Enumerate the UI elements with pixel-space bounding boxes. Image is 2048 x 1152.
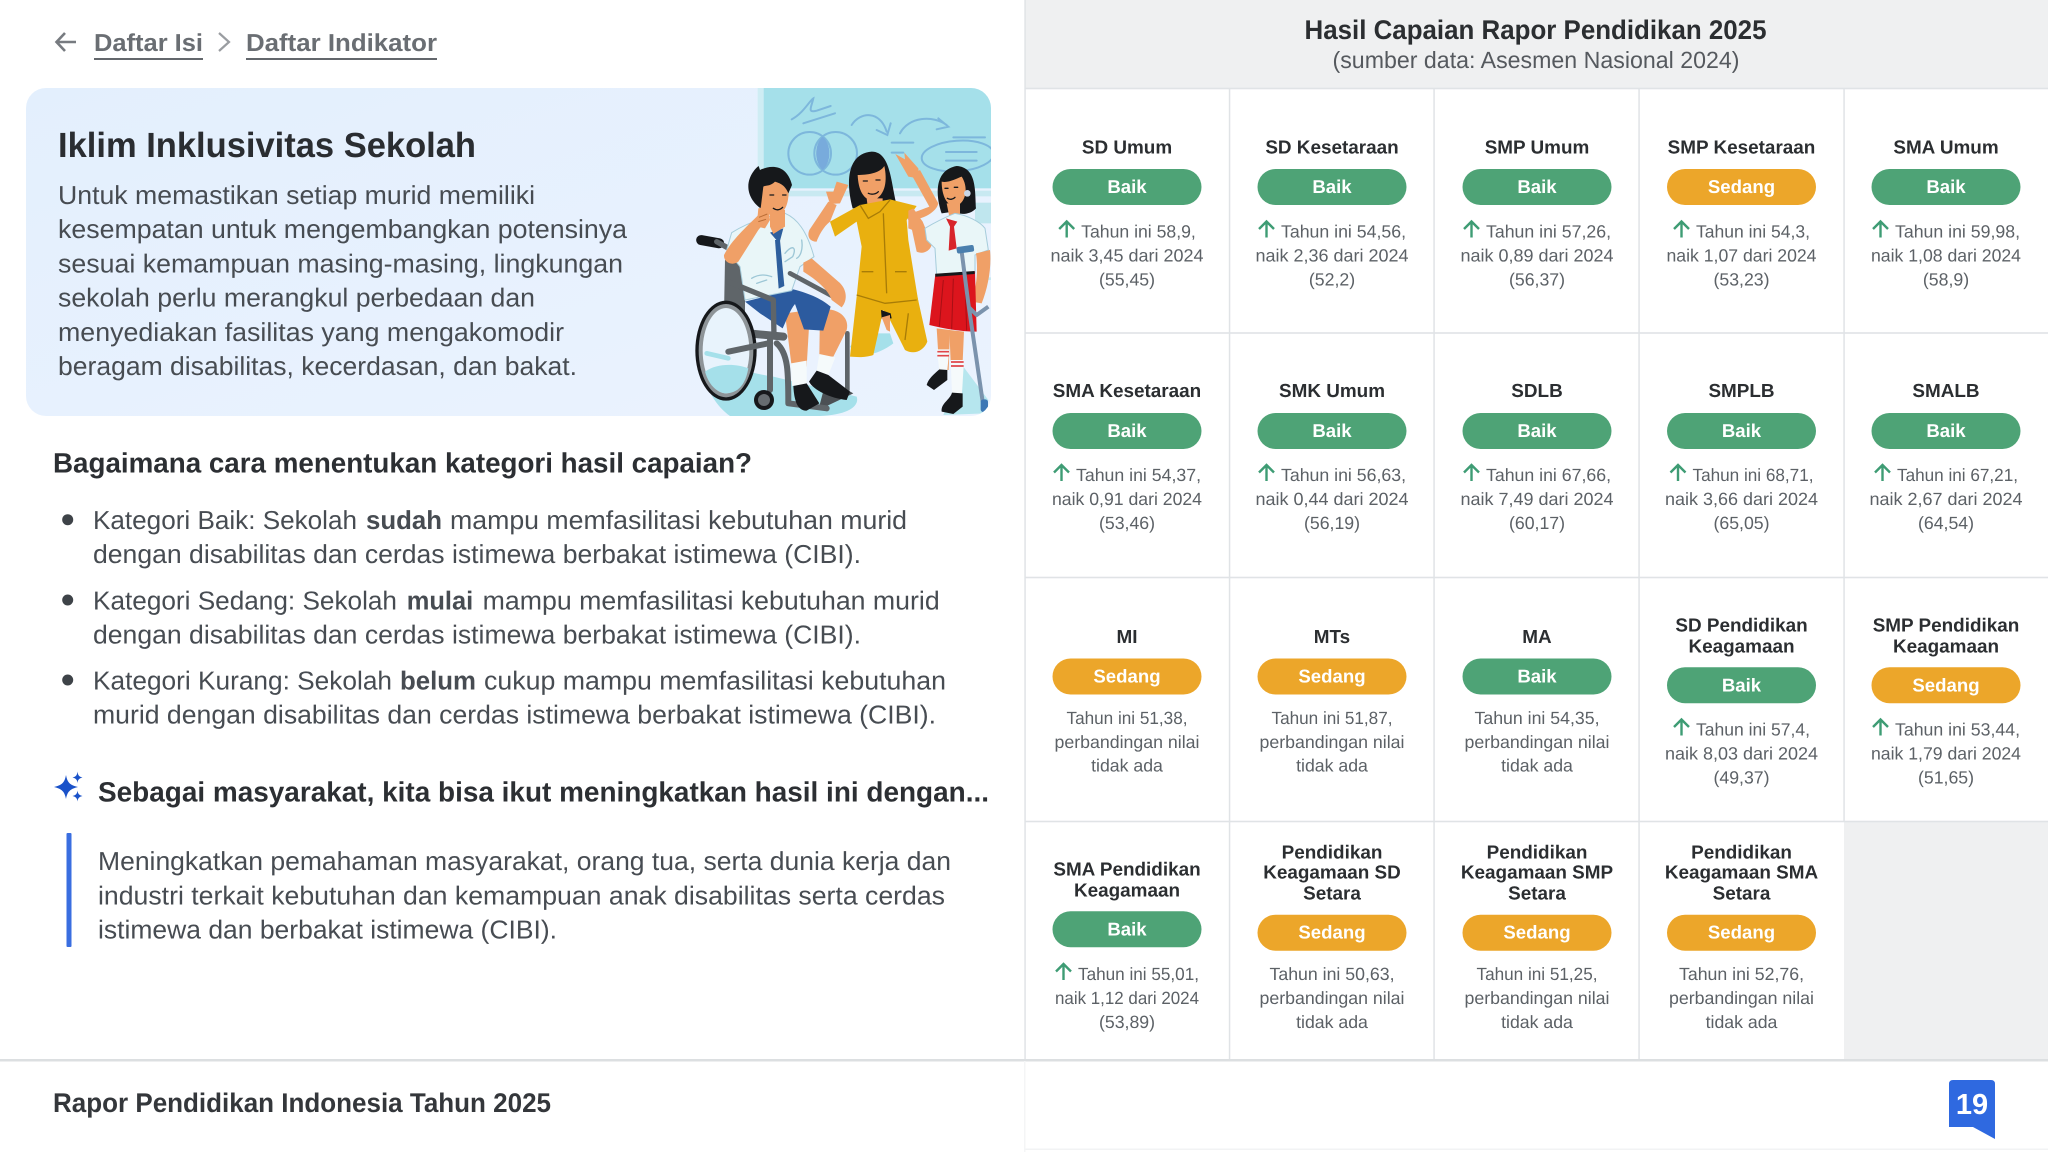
cell: SMK Umum: (56,19) xyxy=(1304,513,1360,533)
cell: SDLB: (60,17) xyxy=(1509,513,1565,533)
cell: SMA Kesetaraan: Baik xyxy=(1107,420,1147,441)
panel: results header xyxy=(1025,0,2048,88)
cell: Pendidikan Keagamaan SMA Setara: Keagamaan SMA xyxy=(1665,863,1818,884)
figure: student in wheelchair xyxy=(695,166,853,411)
cell: MI: MI xyxy=(1116,627,1138,648)
cell: SD Kesetaraan: naik 2,36 dari 2024 xyxy=(1256,246,1409,266)
classroom board xyxy=(758,87,997,280)
cell: SMALB: Baik xyxy=(1926,420,1966,441)
cell: Pendidikan Keagamaan SD Setara: Tahun ini 50,63, xyxy=(1270,964,1394,984)
cell: SD Umum: SD Umum xyxy=(1082,137,1172,158)
cell: Pendidikan Keagamaan SMP Setara: perbandingan nilai xyxy=(1464,988,1610,1008)
cell: SD Umum: Baik xyxy=(1107,176,1147,197)
cell: SD Pendidikan Keagamaan: naik 8,03 dari 2024 xyxy=(1665,744,1818,764)
panel: intro card xyxy=(26,87,997,416)
list item: Kategori Baik: sudah xyxy=(366,505,442,535)
cell: SMALB: (64,54) xyxy=(1918,513,1974,533)
cell: SD Kesetaraan xyxy=(1256,137,1409,290)
cell: Pendidikan Keagamaan SMP Setara: Sedang xyxy=(1503,922,1571,943)
yellow uniform xyxy=(830,199,918,302)
cell: SMK Umum: naik 0,44 dari 2024 xyxy=(1256,489,1409,509)
text block: intro paragraph: sesuai kemampuan masing-masing, lingkungan xyxy=(58,248,623,278)
cell: Pendidikan Keagamaan SD Setara xyxy=(1258,842,1406,1032)
cell: Pendidikan Keagamaan SMA Setara: Tahun ini 52,76, xyxy=(1679,964,1804,984)
cell: SMP Kesetaraan xyxy=(1666,137,1817,290)
list item: Kategori Baik: mampu memfasilitasi kebutuhan murid xyxy=(450,505,907,535)
list item: Kategori Kurang: Kategori Kurang: Sekolah xyxy=(93,666,392,696)
icon: chevron xyxy=(219,33,229,51)
crutch xyxy=(962,252,988,402)
cell: SMP Pendidikan Keagamaan: Keagamaan xyxy=(1893,636,1999,657)
cell: SD Umum: naik 3,45 dari 2024 xyxy=(1050,246,1204,266)
text block: intro paragraph: kesempatan untuk mengembangkan potensinya xyxy=(58,214,628,244)
callout: community action xyxy=(66,833,951,947)
cell: SD Pendidikan Keagamaan: SD Pendidikan xyxy=(1675,616,1808,637)
cell: Pendidikan Keagamaan SD Setara: tidak ada xyxy=(1296,1012,1368,1032)
cell: SMA Pendidikan Keagamaan: (53,89) xyxy=(1099,1012,1155,1032)
cell: MA: tidak ada xyxy=(1501,756,1573,776)
arm xyxy=(975,250,990,304)
icon: back arrow xyxy=(56,33,76,51)
head xyxy=(770,210,785,234)
icon: sparkles xyxy=(54,772,82,802)
cell: SDLB: naik 7,49 dari 2024 xyxy=(1460,489,1614,509)
cell: SMP Umum: SMP Umum xyxy=(1485,137,1589,158)
shirt xyxy=(925,213,988,275)
footer title: Rapor Pendidikan Indonesia Tahun 2025 xyxy=(53,1088,551,1118)
skirt xyxy=(929,271,977,332)
callout: community action: Meningkatkan pemahaman masyarakat, orang tua, serta dunia kerja dan xyxy=(98,846,951,876)
illustration: teacher and students with disabilities xyxy=(695,87,997,416)
cell: MTs xyxy=(1258,627,1406,776)
cell: SD Kesetaraan: SD Kesetaraan xyxy=(1265,137,1399,158)
figure: teacher xyxy=(808,152,938,357)
cell: SMA Kesetaraan xyxy=(1052,381,1202,533)
list item: Kategori Baik: dengan disabilitas dan cerdas istimewa berbakat istimewa (CIBI). xyxy=(93,539,861,569)
cell: SD Kesetaraan: (52,2) xyxy=(1309,270,1355,290)
cell: SMK Umum: SMK Umum xyxy=(1279,381,1385,402)
cell: MTs: Sedang xyxy=(1298,666,1366,686)
heading: how categories are determined: Bagaimana cara menentukan kategori hasil capaian? xyxy=(53,448,752,478)
cell: SMALB: naik 2,67 dari 2024 xyxy=(1870,489,2023,509)
cell: SMPLB xyxy=(1665,381,1818,533)
cell: MTs: Tahun ini 51,87, xyxy=(1272,708,1392,728)
cell: SMA Kesetaraan: Tahun ini 54,37, xyxy=(1076,465,1201,485)
list item: Kategori Baik xyxy=(62,505,907,569)
cell: SD Kesetaraan: Tahun ini 54,56, xyxy=(1281,222,1406,242)
list item: Kategori Kurang: murid dengan disabilitas dan cerdas istimewa berbakat istimewa (CIBI). xyxy=(93,699,936,729)
cell: MI: Sedang xyxy=(1093,666,1161,686)
cell: Pendidikan Keagamaan SMA Setara: tidak ada xyxy=(1706,1012,1778,1032)
cell: SMA Pendidikan Keagamaan: Tahun ini 55,01, xyxy=(1078,964,1199,984)
cell: SMP Kesetaraan: SMP Kesetaraan xyxy=(1668,137,1815,158)
cell: SD Pendidikan Keagamaan: (49,37) xyxy=(1713,767,1770,787)
arms xyxy=(724,216,760,264)
cell: SMP Umum: naik 0,89 dari 2024 xyxy=(1460,246,1614,266)
cell: SMPLB: Tahun ini 68,71, xyxy=(1692,465,1814,485)
heading: Iklim Inklusivitas Sekolah: Iklim Inklusivitas Sekolah xyxy=(58,126,476,165)
cell: SMP Pendidikan Keagamaan: naik 1,79 dari 2024 xyxy=(1871,744,2021,764)
cell: SD Umum: (55,45) xyxy=(1099,270,1155,290)
cell: SD Pendidikan Keagamaan: Keagamaan xyxy=(1688,636,1795,657)
cell: Pendidikan Keagamaan SMA Setara: Setara xyxy=(1713,883,1771,904)
callout: community action: industri terkait kebutuhan dan kemampuan anak disabilitas serta cerdas xyxy=(98,880,945,910)
cell: MI: perbandingan nilai xyxy=(1054,732,1200,752)
floor shadow xyxy=(711,372,858,416)
cell: Pendidikan Keagamaan SMP Setara xyxy=(1461,842,1613,1032)
cell: SMA Pendidikan Keagamaan: Baik xyxy=(1107,918,1147,939)
cell: SD Umum: Tahun ini 58,9, xyxy=(1081,222,1196,242)
cell: SMP Umum: (56,37) xyxy=(1509,270,1565,290)
cell: Pendidikan Keagamaan SMA Setara: Sedang xyxy=(1708,922,1775,943)
text block: intro paragraph: sekolah perlu merangkul perbedaan dan xyxy=(58,282,535,312)
cell: Pendidikan Keagamaan SD Setara: Sedang xyxy=(1298,922,1366,943)
cell: MI: tidak ada xyxy=(1091,756,1163,776)
cell: SMP Kesetaraan: Tahun ini 54,3, xyxy=(1696,222,1810,242)
cell: SDLB xyxy=(1460,381,1614,533)
legs xyxy=(786,312,809,366)
cell: Pendidikan Keagamaan SMA Setara xyxy=(1665,842,1818,1032)
cell: Pendidikan Keagamaan SMP Setara: Keagamaan SMP xyxy=(1461,863,1613,884)
cell: Pendidikan Keagamaan SD Setara: Setara xyxy=(1303,883,1361,904)
cell: SMA Umum xyxy=(1871,137,2021,290)
callout: community action: istimewa dan berbakat istimewa (CIBI). xyxy=(98,914,557,944)
cell: SD Umum xyxy=(1050,137,1204,290)
cell: SMA Kesetaraan: SMA Kesetaraan xyxy=(1053,381,1201,402)
cell: SMA Pendidikan Keagamaan: naik 1,12 dari 2024 xyxy=(1055,988,1199,1008)
cell: SMPLB: naik 3,66 dari 2024 xyxy=(1665,489,1818,509)
cell: SMA Pendidikan Keagamaan: SMA Pendidikan xyxy=(1053,860,1201,881)
subtitle: data source: (sumber data: Asesmen Nasional 2024) xyxy=(1332,47,1740,73)
cell: Pendidikan Keagamaan SMP Setara: Setara xyxy=(1508,883,1566,904)
cell: SD Pendidikan Keagamaan: Baik xyxy=(1722,674,1762,695)
cell: SMP Pendidikan Keagamaan: Sedang xyxy=(1912,674,1980,695)
big wheel xyxy=(695,301,757,401)
cell: SMA Pendidikan Keagamaan xyxy=(1052,860,1202,1032)
cell: Pendidikan Keagamaan SMP Setara: tidak ada xyxy=(1501,1012,1573,1032)
list item: Kategori Kurang: belum xyxy=(400,666,476,696)
list item: Kategori Baik: Kategori Baik: Sekolah xyxy=(93,505,357,535)
cell: SMP Pendidikan Keagamaan: Tahun ini 53,44, xyxy=(1895,720,2020,740)
cell: SMP Kesetaraan: naik 1,07 dari 2024 xyxy=(1666,246,1817,266)
cell: MTs: tidak ada xyxy=(1296,756,1368,776)
cell: SMP Kesetaraan: (53,23) xyxy=(1713,270,1770,290)
cell: SDLB: Tahun ini 67,66, xyxy=(1486,465,1611,485)
cell: MA xyxy=(1462,627,1612,776)
cell: SMA Umum: (58,9) xyxy=(1923,270,1969,290)
cell: SMA Umum: Tahun ini 59,98, xyxy=(1895,222,2020,242)
cell: SMK Umum xyxy=(1256,381,1409,533)
cell: SMP Umum: Baik xyxy=(1517,176,1557,197)
cell: SMA Umum: SMA Umum xyxy=(1893,137,1999,158)
list item: Kategori Kurang xyxy=(62,666,946,729)
panel: results grid xyxy=(1050,137,2023,1032)
page number badge xyxy=(1949,1080,1995,1139)
cell: SMP Pendidikan Keagamaan: SMP Pendidikan xyxy=(1873,616,2019,637)
list item: Kategori Sedang: mulai xyxy=(407,585,473,615)
cell: MTs: MTs xyxy=(1314,627,1350,648)
cell: SMALB: SMALB xyxy=(1912,381,1980,402)
cell: SMA Umum: naik 1,08 dari 2024 xyxy=(1871,246,2021,266)
cell: SMA Kesetaraan: naik 0,91 dari 2024 xyxy=(1052,489,1202,509)
shorts xyxy=(745,289,831,331)
link: Daftar Indikator: Daftar Indikator xyxy=(246,30,437,57)
cell: MA: Tahun ini 54,35, xyxy=(1474,708,1600,728)
text block: intro paragraph: Untuk memastikan setiap murid memiliki xyxy=(58,180,535,210)
cell: SMP Umum xyxy=(1460,137,1614,290)
right raised arm xyxy=(907,170,938,220)
cell: SDLB: Baik xyxy=(1517,420,1557,441)
cell: Pendidikan Keagamaan SMA Setara: Pendidikan xyxy=(1691,842,1792,863)
cell: MTs: perbandingan nilai xyxy=(1260,732,1404,752)
link: Daftar Isi: Daftar Isi xyxy=(94,30,203,57)
left raised arm xyxy=(808,202,837,242)
cell: SMA Pendidikan Keagamaan: Keagamaan xyxy=(1074,880,1180,901)
text block: intro paragraph: beragam disabilitas, kecerdasan, dan bakat. xyxy=(58,351,577,381)
hair xyxy=(849,152,896,208)
cell: Pendidikan Keagamaan SMP Setara: Tahun ini 51,25, xyxy=(1476,964,1598,984)
cell: SD Kesetaraan: Baik xyxy=(1312,176,1352,197)
breadcrumb navigation xyxy=(56,30,437,60)
cell: MI xyxy=(1052,627,1202,776)
cell: SD Pendidikan Keagamaan: Tahun ini 57,4, xyxy=(1696,720,1810,740)
cell: Pendidikan Keagamaan SMA Setara: perbandingan nilai xyxy=(1669,988,1814,1008)
cell: SMALB: Tahun ini 67,21, xyxy=(1897,465,2018,485)
cell: MA: MA xyxy=(1522,627,1552,648)
page number badge: 19 xyxy=(1956,1089,1988,1121)
legs xyxy=(937,328,950,370)
cell: Pendidikan Keagamaan SMP Setara: Pendidikan xyxy=(1487,842,1587,863)
cell: Pendidikan Keagamaan SD Setara: perbandingan nilai xyxy=(1260,988,1404,1008)
cell: SMP Kesetaraan: Sedang xyxy=(1708,176,1775,197)
cell: MA: Baik xyxy=(1517,666,1557,686)
cell: SMPLB: Baik xyxy=(1722,420,1762,441)
text block: intro paragraph xyxy=(58,180,628,381)
cell: SMPLB: (65,05) xyxy=(1713,513,1770,533)
text block: intro paragraph: menyediakan fasilitas yang mengakomodir xyxy=(58,317,564,347)
cell: SMP Pendidikan Keagamaan: (51,65) xyxy=(1918,767,1974,787)
cell: SMP Pendidikan Keagamaan xyxy=(1871,616,2021,787)
cell: MI: Tahun ini 51,38, xyxy=(1066,708,1188,728)
cell: SMK Umum: Tahun ini 56,63, xyxy=(1281,465,1406,485)
cell: SD Pendidikan Keagamaan xyxy=(1665,616,1818,787)
list item: Kategori Kurang: cukup mampu memfasilitasi kebutuhan xyxy=(484,666,946,696)
armrest frame xyxy=(742,284,777,332)
cell: SMALB xyxy=(1870,381,2023,533)
list item: Kategori Sedang: dengan disabilitas dan cerdas istimewa berbakat istimewa (CIBI). xyxy=(93,619,861,649)
heading: community call to action: Sebagai masyarakat, kita bisa ikut meningkatkan hasil ini dengan... xyxy=(98,776,989,808)
list item: Kategori Sedang: mampu memfasilitasi kebutuhan murid xyxy=(483,585,940,615)
shirt xyxy=(727,213,814,300)
cell: SMA Umum: Baik xyxy=(1926,176,1966,197)
heading: Hasil Capaian Rapor Pendidikan 2025: Hasil Capaian Rapor Pendidikan 2025 xyxy=(1304,15,1766,45)
cell: SMPLB: SMPLB xyxy=(1708,381,1775,402)
cell: SMP Umum: Tahun ini 57,26, xyxy=(1486,222,1611,242)
cell: Pendidikan Keagamaan SD Setara: Pendidikan xyxy=(1282,842,1382,863)
list item: Kategori Sedang xyxy=(62,585,940,649)
cell: SDLB: SDLB xyxy=(1511,381,1563,402)
empty grid cell xyxy=(1844,822,2048,1060)
cell: MA: perbandingan nilai xyxy=(1464,732,1610,752)
figure: student with crutch xyxy=(912,166,990,414)
cell: SMA Kesetaraan: (53,46) xyxy=(1099,513,1155,533)
cell: Pendidikan Keagamaan SD Setara: Keagamaan SD xyxy=(1263,863,1401,884)
list item: Kategori Sedang: Kategori Sedang: Sekolah xyxy=(93,585,397,615)
cell: SMK Umum: Baik xyxy=(1312,420,1352,441)
list: category definitions xyxy=(62,505,946,729)
left hand arm xyxy=(912,222,932,253)
